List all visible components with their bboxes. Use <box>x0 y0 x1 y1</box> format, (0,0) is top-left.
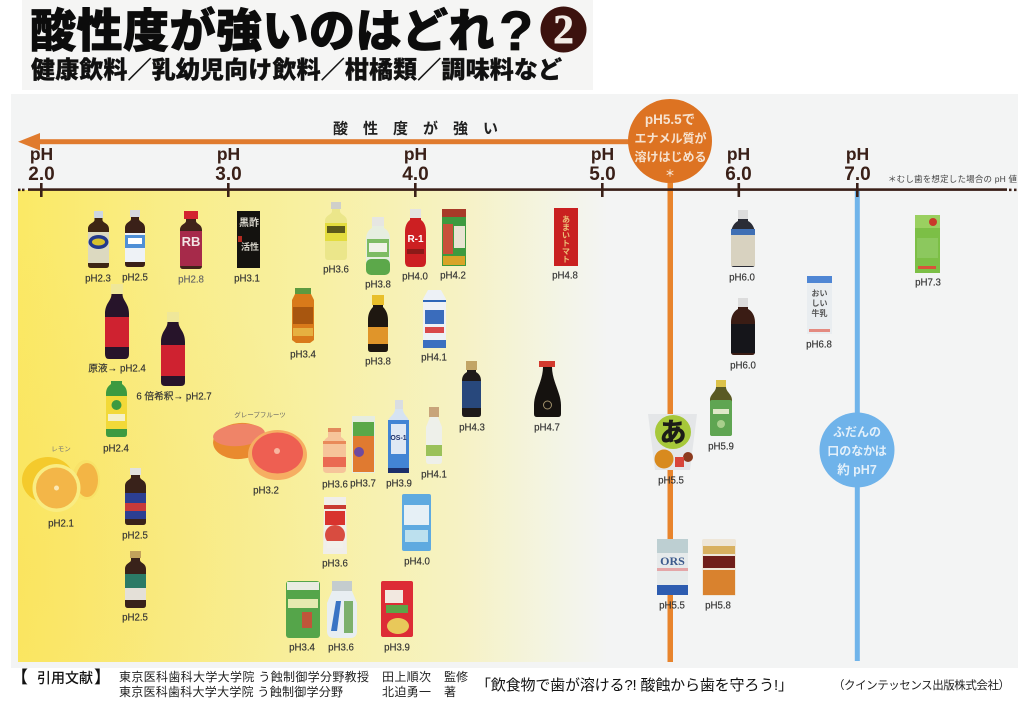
product: brown bottle pH2.3 <box>85 211 111 284</box>
product: white yogurt bottle pH3.6: pH3.6 <box>328 642 354 654</box>
product: ORS can pH5.5: pH5.5 <box>659 600 685 612</box>
reference authors: 田上順次 <box>382 670 431 684</box>
product: dressing bottle pH4.1: pH4.1 <box>421 470 447 480</box>
product: milk carton pH6.8 <box>806 276 832 350</box>
product: vegetable juice pH3.7: pH3.7 <box>350 478 376 490</box>
product: black vinegar undiluted pH2.4 <box>88 284 146 374</box>
reference authors <box>119 669 468 699</box>
product: yogurt drink pH4.1: pH4.1 <box>421 352 447 364</box>
product: RB bottle pH2.8: pH2.8 <box>178 274 204 286</box>
product: green yogurt drink pH3.8: pH3.8 <box>365 280 391 290</box>
axis label 3.0: pH <box>217 144 240 164</box>
title block <box>22 0 593 90</box>
product: infant drink pack pH3.6: pH3.6 <box>322 558 348 570</box>
product: barley tea bottle pH6.0 <box>729 210 756 284</box>
product: ORS can pH5.5 <box>657 539 688 612</box>
product: grapefruit pH3.2: グレープフルーツ <box>234 410 286 419</box>
product: R-1 bottle pH4.0: pH4.0 <box>402 272 429 282</box>
product: green tea bottle pH5.9 <box>708 380 734 452</box>
product: lemon bottle pH3.6: pH3.6 <box>323 264 349 276</box>
axis label 7.0: 7.0 <box>844 164 871 185</box>
product: grapefruit pH3.2 <box>212 410 307 496</box>
product: black vinegar pack pH3.1: 活性 <box>241 241 259 252</box>
reference authors: 監修 <box>444 669 468 684</box>
product: vegetable juice pH3.7 <box>350 416 376 490</box>
title: ? <box>499 0 534 62</box>
product: OS-1 bottle pH3.9: OS-1 <box>390 435 407 442</box>
product: instant miso soup cup pH5.5 <box>648 414 697 486</box>
product: tomato juice pack pH4.8: pH4.8 <box>552 270 578 282</box>
product: brown bottle pH2.5 <box>122 210 148 284</box>
product: green yogurt drink pH3.8 <box>365 217 391 290</box>
axis label 5.0: pH <box>591 144 614 164</box>
number badge <box>540 6 586 52</box>
axis label 6.0 <box>725 144 752 185</box>
product: milk carton pH6.8: しい <box>812 299 828 308</box>
product: vitamin bottle pH2.5 <box>122 468 148 542</box>
product: infant drink pack pH3.6 <box>322 497 348 570</box>
product: baby juice pack pH3.4: pH3.4 <box>289 642 316 654</box>
product: orange can pH3.4 <box>290 288 317 360</box>
product: blue pouch pH4.0 <box>402 494 431 568</box>
product: milk carton pH6.8: pH6.8 <box>806 340 832 350</box>
title: 酸性度が強いのはどれ <box>30 5 495 57</box>
product: R-1 bottle pH4.0: R-1 <box>407 234 424 245</box>
product: brown bottle pH2.5: pH2.5 <box>122 272 148 284</box>
product: dark bottle pH4.3: pH4.3 <box>459 422 485 434</box>
callout: enamel dissolves at pH 5.5: pH5.5で <box>645 112 695 127</box>
axis label 4.0: 4.0 <box>402 164 429 185</box>
product: baby barley tea pack pH5.8: pH5.8 <box>705 600 731 612</box>
product: tomato juice pack pH4.8: ト <box>562 255 570 264</box>
product: R-1 bottle pH4.0 <box>402 209 429 282</box>
product: tomato juice pack pH4.8: あ <box>562 215 570 224</box>
callout: normal mouth about pH 7: ふだんの <box>833 425 881 439</box>
axis label 6.0: 6.0 <box>725 164 752 185</box>
product: vitamin bottle 2000 pH2.5: pH2.5 <box>122 612 148 624</box>
product: milk carton pH6.8: おい <box>812 289 828 298</box>
product: lemon drink pH2.4: pH2.4 <box>103 444 130 454</box>
axis label 2.0: pH <box>30 144 53 164</box>
product: black vinegar diluted pH2.7: 6 倍希釈→ pH2.7 <box>136 390 212 402</box>
product: soy sauce bottle pH4.7 <box>534 361 561 434</box>
product: ORS can pH5.5: ORS <box>660 554 685 568</box>
blue mouth pH line <box>855 190 860 661</box>
product: white yogurt bottle pH3.6 <box>327 581 357 654</box>
product: lemons pH2.1: レモン <box>51 445 71 453</box>
product: blue pouch pH4.0: pH4.0 <box>404 556 431 568</box>
product: OS-1 bottle pH3.9 <box>386 400 412 490</box>
axis label 4.0: pH <box>404 144 427 164</box>
references footer <box>11 668 1010 699</box>
callout: enamel dissolves at pH 5.5: 溶けはじめる <box>634 149 707 164</box>
product: instant miso soup cup pH5.5: あ <box>660 418 686 448</box>
product: small lactic drink pH3.6 <box>322 428 348 490</box>
product: black vinegar pack pH3.1: 黒酢 <box>239 216 259 229</box>
product: soy sauce bottle pH4.7: pH4.7 <box>534 422 560 434</box>
product: red pouch pH3.9 <box>381 581 413 654</box>
product: orange can pH3.4: pH3.4 <box>290 350 317 360</box>
product: black vinegar pack pH3.1 <box>234 211 260 284</box>
callout: normal mouth about pH 7 <box>820 412 894 488</box>
product: tomato juice pack pH4.8 <box>552 208 578 282</box>
product: lemons pH2.1: pH2.1 <box>48 518 74 530</box>
axis label 5.0 <box>589 144 616 185</box>
callout: normal mouth about pH 7: 口のなかは <box>827 444 887 458</box>
product: RB bottle pH2.8 <box>178 211 204 286</box>
publisher: （クインテッセンス出版株式会社） <box>833 678 1010 692</box>
axis label 5.0: 5.0 <box>589 164 616 185</box>
product: grapefruit pH3.2: pH3.2 <box>253 486 279 496</box>
product: red pouch pH3.9: pH3.9 <box>384 642 410 654</box>
product: RB bottle pH2.8: RB <box>182 234 200 249</box>
number badge: 2 <box>553 6 574 52</box>
reference authors: 北迫勇一 <box>382 685 431 699</box>
product: yogurt drink pH4.1 <box>421 290 447 364</box>
subtitle: 健康飲料／乳幼児向け飲料／柑橘類／調味料など <box>31 57 562 84</box>
product: milk carton pH6.8: 牛乳 <box>812 308 828 318</box>
product: baby barley tea pack pH5.8 <box>702 539 736 612</box>
product: lemon bottle pH3.6 <box>323 202 349 276</box>
reference heading: 】 <box>94 668 111 687</box>
product: dark bottle pH4.3 <box>459 361 485 434</box>
reference authors: 東京医科歯科大学大学院 う蝕制御学分野教授 <box>119 669 369 684</box>
product: tomato juice pack pH4.8: マ <box>562 247 570 256</box>
callout: enamel dissolves at pH 5.5: エナメル質が <box>634 130 707 146</box>
product: vitamin bottle pH2.5: pH2.5 <box>122 530 148 542</box>
product: lemons pH2.1 <box>22 445 100 530</box>
axis label 4.0 <box>402 144 429 185</box>
product: baby juice pack pH3.4 <box>286 581 320 654</box>
axis label 7.0: pH <box>846 144 869 164</box>
orange enamel line <box>668 182 673 662</box>
product: tomato juice pack pH4.8: ま <box>562 223 570 232</box>
product: tomato juice pack pH4.8: ト <box>562 239 570 248</box>
product: green tea bottle pH5.9: pH5.9 <box>708 442 734 452</box>
product: tomato juice pack pH4.8: い <box>562 231 570 240</box>
arrow label: 酸性度が強い <box>333 120 498 138</box>
product: oolong tea bottle pH6.0: pH6.0 <box>730 360 757 372</box>
product: soy milk pack pH7.3: pH7.3 <box>915 278 941 288</box>
product: soy milk pack pH7.3 <box>915 215 941 288</box>
product: small lactic drink pH3.6: pH3.6 <box>322 480 348 490</box>
product: vegetable juice pack pH4.2: pH4.2 <box>440 270 466 282</box>
pH axis <box>18 183 1016 197</box>
product: black vinegar diluted pH2.7 <box>136 312 212 402</box>
reference heading: 引用文献 <box>37 670 93 686</box>
product: ponzu bottle pH3.8 <box>365 295 391 368</box>
reference authors: 東京医科歯科大学大学院 う蝕制御学分野 <box>119 684 343 699</box>
product: vegetable juice pack pH4.2 <box>440 209 466 282</box>
axis label 7.0 <box>844 144 871 185</box>
product: black vinegar pack pH3.1: pH3.1 <box>234 274 260 284</box>
product: vitamin bottle 2000 pH2.5 <box>122 551 148 624</box>
acidity arrow <box>18 133 636 150</box>
product: OS-1 bottle pH3.9: pH3.9 <box>386 478 412 490</box>
product: dressing bottle pH4.1 <box>421 407 447 480</box>
axis footnote: ＊むし歯を想定した場合の pH 値 <box>888 174 1017 184</box>
callout: enamel dissolves at pH 5.5: ＊ <box>665 169 675 180</box>
product: brown bottle pH2.3: pH2.3 <box>85 274 111 284</box>
axis label 3.0: 3.0 <box>215 164 242 185</box>
yellow acidity zone <box>18 190 608 662</box>
reference heading: 【 <box>11 668 28 687</box>
product: lemon drink pH2.4 <box>103 381 130 454</box>
axis label 3.0 <box>215 144 242 185</box>
product: oolong tea bottle pH6.0 <box>730 298 757 372</box>
callout: normal mouth about pH 7: 約 pH7 <box>837 462 877 477</box>
axis label 6.0: pH <box>727 144 750 164</box>
product: black vinegar undiluted pH2.4: 原液→ pH2.4 <box>88 362 146 374</box>
book title: 「飲食物で歯が溶ける?! 酸蝕から歯を守ろう!」 <box>476 677 793 694</box>
axis label 2.0: 2.0 <box>28 164 55 185</box>
product: ponzu bottle pH3.8: pH3.8 <box>365 356 391 368</box>
reference authors: 著 <box>444 685 456 699</box>
callout: enamel dissolves at pH 5.5 <box>628 99 712 183</box>
product: instant miso soup cup pH5.5: pH5.5 <box>658 476 684 486</box>
product: barley tea bottle pH6.0: pH6.0 <box>729 272 756 284</box>
axis label 2.0 <box>28 144 55 185</box>
